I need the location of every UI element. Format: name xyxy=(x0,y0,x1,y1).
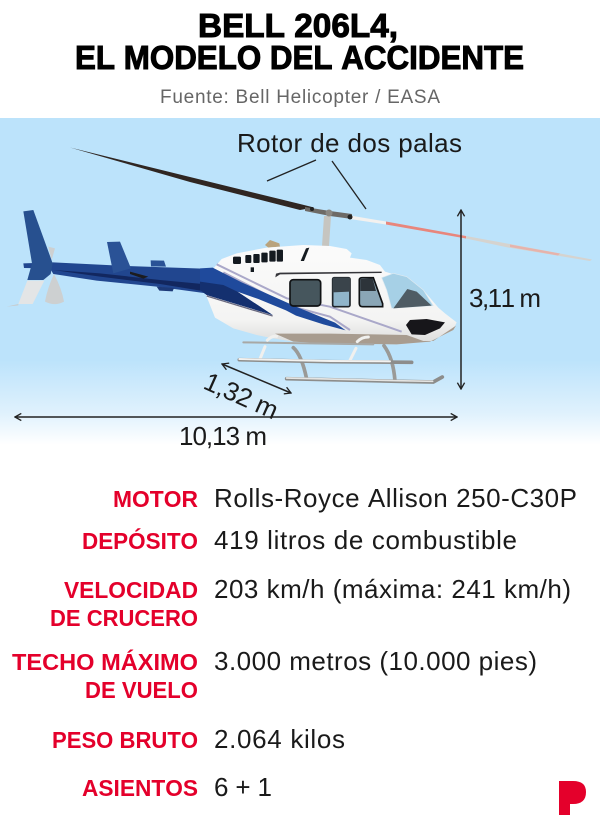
spec: seats: ASIENTOS xyxy=(82,775,198,801)
title xyxy=(75,7,524,76)
tail section xyxy=(7,210,230,307)
spec: seats: 6 + 1 xyxy=(214,772,272,802)
engine intake windows xyxy=(233,248,382,277)
icon: publisher logo xyxy=(559,781,586,815)
spec: motor: Rolls-Royce Allison 250-C30P xyxy=(214,483,577,513)
spec: service ceiling xyxy=(12,646,537,703)
panel: sky background xyxy=(0,118,600,445)
arrow: height xyxy=(460,210,462,389)
tail boom xyxy=(23,262,230,293)
fuselage xyxy=(200,240,457,344)
white body xyxy=(200,245,457,344)
rotor hub and mast xyxy=(305,207,352,246)
spec: gross weight: PESO BRUTO xyxy=(52,727,198,753)
spec: cruise speed xyxy=(50,574,571,631)
source line: Fuente: Bell Helicopter / EASA xyxy=(160,87,440,108)
spec: service ceiling: TECHO MÁXIMO xyxy=(12,648,198,675)
spec: service ceiling: 3.000 metros (10.000 pies) xyxy=(214,646,537,676)
arrow: skid width xyxy=(222,364,291,393)
landing skids xyxy=(239,336,442,382)
spec: cruise speed: DE CRUCERO xyxy=(50,605,198,631)
spec: cruise speed: 203 km/h (máxima: 241 km/h) xyxy=(214,574,571,604)
label: skid width: 1,32 m xyxy=(200,366,283,425)
spec: motor: MOTOR xyxy=(113,486,198,512)
spec: gross weight xyxy=(52,724,345,754)
spec: seats xyxy=(82,772,272,802)
arrow: length xyxy=(15,416,457,418)
label: length: 10,13 m xyxy=(179,421,267,451)
nose radome xyxy=(406,319,445,335)
spec: tank: DEPÓSITO xyxy=(82,527,198,554)
small upper fin xyxy=(151,260,166,267)
spec: tank xyxy=(82,525,517,555)
spec: tank: 419 litros de combustible xyxy=(214,525,517,555)
label: height: 3,11 m xyxy=(469,283,541,313)
main rotor blade, front xyxy=(350,216,592,261)
title: BELL 206L4, xyxy=(198,7,398,44)
spec: gross weight: 2.064 kilos xyxy=(214,724,345,754)
spec: cruise speed: VELOCIDAD xyxy=(64,577,198,603)
lavender stripes xyxy=(217,264,402,332)
cabin windows xyxy=(290,278,383,307)
engine exhaust xyxy=(265,240,280,248)
windscreen xyxy=(382,273,433,308)
tan belly xyxy=(275,326,456,344)
title: EL MODELO DEL ACCIDENTE xyxy=(75,39,524,76)
stabilizer xyxy=(107,242,131,273)
spec table xyxy=(12,483,577,802)
leader lines: rotor label xyxy=(267,160,366,209)
main rotor blade, rear xyxy=(70,148,314,210)
tail rotor xyxy=(45,247,64,304)
spec: service ceiling: DE VUELO xyxy=(85,677,198,703)
label: two-blade rotor: Rotor de dos palas xyxy=(237,128,462,158)
blue swoosh xyxy=(200,268,346,330)
vertical fin xyxy=(23,210,53,280)
helicopter illustration xyxy=(7,148,592,382)
